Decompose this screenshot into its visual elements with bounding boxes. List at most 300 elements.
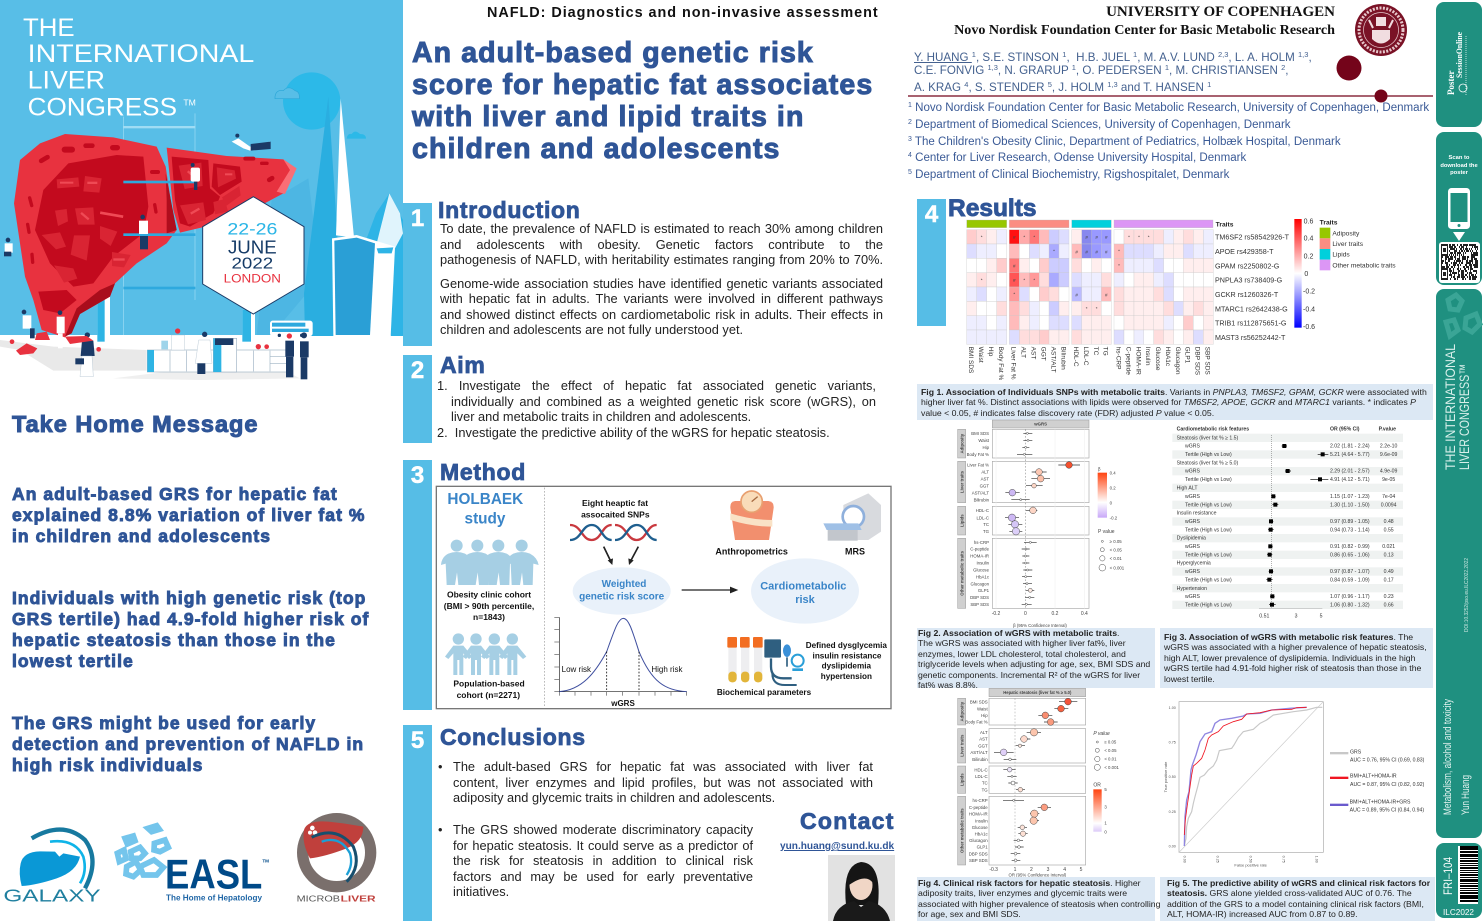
label: population cohort: cohort (n=2271) [457, 690, 520, 700]
significance marks: * [1086, 306, 1088, 311]
sidebar [1436, 2, 1483, 918]
fig 2 caption: Fig 2. Association of wGRS with metabolic traits. [918, 628, 1119, 638]
poster title: with liver and lipid traits in [412, 101, 804, 133]
heatmap colour scale: -0.6 [1303, 324, 1315, 331]
scientist figures [4, 134, 309, 379]
red rubble [10, 332, 101, 355]
logo: microbliver: MICROB [297, 893, 341, 903]
OR values: 4.91 (4.12 - 5.71) [1330, 477, 1370, 483]
fig 2 caption: fat% was 8.8%. [918, 680, 978, 690]
authors: Y. HUANG 1, S.E. STINSON 1, H.B. JUEL 1, M. A.V. LUND 2,3, L. A. HOLM 1,3, [914, 50, 1312, 64]
P values: 0.23 [1384, 594, 1394, 600]
take home message 1 [12, 484, 366, 546]
icon: DNA helices [570, 525, 657, 540]
icon: MRI scanner [823, 493, 881, 541]
fig 5 caption [1160, 877, 1435, 921]
section number 1 [403, 203, 432, 346]
heatmap column labels: TG [1102, 347, 1109, 356]
panel: poster number and barcode: ILC2022 [1443, 907, 1474, 917]
significance marks: # [1013, 235, 1016, 240]
significance marks: # [1075, 292, 1078, 297]
beta legend: -0.2 [1110, 516, 1118, 521]
ROC axes: 1.00 [1315, 856, 1319, 863]
ROC axes: 0.50 [1248, 856, 1252, 863]
fig 3 caption: high ALT, lower prevalence of dyslipidemia. Individuals in the high [1164, 653, 1415, 663]
ROC legend: AUC = 0.76, 95% CI (0.69, 0.83) [1350, 758, 1425, 764]
affiliations: 3 The Children's Obesity Clinic, Department of Pediatrics, Holbæk Hospital, Denmark [908, 136, 1341, 148]
OR values: 1.15 (1.07 - 1.23) [1330, 494, 1370, 500]
poster title: children and adolescents [412, 133, 780, 165]
trait labels: GLP1 [978, 588, 990, 593]
take home message 3: The GRS might be used for early [12, 713, 316, 733]
trait labels: LDL-C [975, 774, 988, 779]
trait labels: AST/ALT [972, 490, 989, 495]
significance marks: * [981, 234, 983, 239]
label: biochemical parameters: Biochemical parameters [717, 688, 812, 697]
ROC axes: 0.50 [1169, 775, 1176, 779]
panel: congress and session details [1436, 289, 1482, 838]
trait labels: HOMA-IR [970, 554, 989, 559]
take home message 3: detection and prevention of NAFLD in [12, 734, 364, 754]
text: introduction: and adolescents with obesity. Genetic factors contribute to the [440, 236, 883, 252]
significance marks: # [1095, 249, 1098, 254]
panels and strips: Liver traits [959, 470, 964, 493]
fig 4 caption: for age, sex and BMI SDS. [918, 909, 1021, 919]
contact email: yun.huang@sund.ku.dk [780, 841, 894, 852]
significance marks: # [1095, 235, 1098, 240]
fig 3 caption: wGRS tertile had 4.91-fold higher risk of steatosis than those in the [1164, 663, 1421, 673]
arrows: SNPs to score [604, 547, 638, 565]
heatmap column labels: C-peptide [1124, 347, 1131, 375]
trait labels: HbA1c [975, 831, 988, 836]
feature labels: High ALT [1177, 485, 1198, 491]
axis labels: 0.2 [1052, 611, 1059, 617]
text: conclusions: content, liver enzymes and lipid profiles, but was not associated with [453, 774, 873, 790]
significance marks: # [1013, 264, 1016, 269]
heatmap column labels: ALT [1020, 347, 1027, 358]
table stripes [1172, 434, 1403, 609]
section number 3: 3 [411, 462, 424, 489]
fig 3 caption: wGRS was associated with a higher prevalence of hepatic steatosis, [1164, 642, 1427, 652]
heatmap column labels: HOMA-IR [1134, 347, 1141, 375]
axis labels: OR (95% Confidence Interval) [1008, 872, 1067, 877]
date hexagon: 2022 [232, 256, 273, 273]
heatmap column labels: BMI SDS [967, 347, 974, 374]
trait labels: Glucagon [970, 581, 990, 586]
traits legend: Liver traits [1332, 241, 1364, 248]
text: introduction: with hepatic fat in adults. The variants were involved in different pathways [440, 291, 883, 306]
trait labels: Insulin [976, 561, 990, 566]
axis labels: 2 [1030, 867, 1033, 873]
heatmap row labels: GPAM rs2250802-G [1215, 262, 1280, 270]
feature labels: Insulin resistance [1177, 511, 1217, 517]
trait labels: Waist [977, 706, 988, 711]
university name: UNIVERSITY OF COPENHAGEN [1106, 4, 1335, 20]
text: conclusions: • [438, 822, 442, 837]
congress name: TM [183, 97, 196, 107]
heatmap column labels: AST [1030, 347, 1037, 359]
trait labels: HOMA-IR [969, 811, 988, 816]
label: defined conditions: dyslipidemia [822, 662, 871, 671]
feature labels: Tertile (High vs Low) [1185, 527, 1232, 533]
ROC legend: GRS [1350, 750, 1362, 756]
axis labels [992, 611, 1088, 628]
ROC axes: 0.25 [1169, 810, 1176, 814]
curve: GRS [1184, 707, 1322, 846]
icon: blood tubes and cuff [727, 637, 804, 685]
significance marks: * [1013, 292, 1015, 297]
heatmap row labels: TRIB1 rs112875651-G [1215, 320, 1287, 328]
heatmap column labels: Hip [987, 347, 994, 357]
P values: 9e-05 [1382, 477, 1395, 483]
take home message 2: Individuals with high genetic risk (top [12, 588, 366, 608]
ROC axes: 0.75 [1281, 856, 1285, 863]
poster title [411, 37, 873, 165]
text: aim: 1. Investigate the effect of hepatic fat associated genetic variants, [437, 378, 876, 393]
P values: 0.13 [1384, 552, 1394, 558]
heatmap column labels: LDL-C [1082, 347, 1089, 366]
chart: wGRS distribution: wGRS [610, 699, 635, 708]
panels and strips: Adiposity [959, 701, 964, 722]
take home message 2: lowest tertile [12, 651, 134, 671]
fig 1 caption: higher liver fat %. Distinct associations with lipids were observed for TM6SF2, APOE, GCKR and MTARC1 variants. * indicates P [921, 397, 1416, 407]
bus [270, 321, 313, 337]
feature labels: Tertile (High vs Low) [1185, 477, 1232, 483]
panel: congress and session details: THE INTERNATIONAL [1442, 344, 1458, 470]
congress name [23, 14, 254, 121]
trait labels: DBP SDS [969, 851, 988, 856]
significance marks: # [1105, 292, 1108, 297]
beta legend: 0.2 [1110, 485, 1116, 490]
logo: microbliver: LIVER [341, 893, 376, 903]
ROC axes: 0.25 [1215, 856, 1219, 863]
text: introduction: children and adolescents are not fully understood yet. [440, 322, 743, 337]
take home message 2 [12, 588, 369, 671]
heatmap column labels: GGT [1040, 347, 1047, 361]
fig 3 caption [1160, 628, 1433, 688]
axis labels: -0.3 [989, 867, 998, 873]
text: conclusions [438, 759, 873, 899]
table header: P.value [1379, 427, 1396, 433]
heatmap colour scale [1294, 218, 1315, 331]
affiliations: 5 Department of Clinical Biochemistry, Rigshospitalet, Denmark [908, 169, 1229, 181]
significance marks: * [1023, 277, 1025, 282]
section number 2 [403, 355, 432, 443]
ROC legend [1330, 750, 1425, 814]
table header: OR (95% CI) [1330, 427, 1360, 433]
significance marks: * [1096, 306, 1098, 311]
ROC axes: 1.00 [1169, 706, 1176, 710]
trait labels: Bilirubin [974, 497, 990, 502]
trait labels: BMI SDS [971, 431, 989, 436]
fig 4 forest plot [957, 688, 1119, 877]
trait labels: AST [981, 476, 989, 481]
text: conclusions: the risk for steatosis in addition to clinical risk [453, 853, 753, 868]
text: introduction: and showed distinct effects on cardiometabolic risk in adults. Their effects in [440, 306, 883, 322]
text: conclusions: adiposity and glycemic traits in children and adolescents. [453, 790, 775, 805]
panel: scan to download [1436, 132, 1482, 285]
significance marks: # [1105, 249, 1108, 254]
axis labels: 0 [1024, 611, 1027, 617]
date hexagon: 22-26 [227, 220, 277, 239]
table header: Cardiometabolic risk features [1177, 427, 1249, 433]
trait labels: GGT [978, 743, 988, 748]
logo: galaxy: GALAXY [3, 885, 101, 905]
OR legend [1093, 783, 1107, 834]
significance marks: * [1033, 277, 1035, 282]
confidence intervals [994, 702, 1077, 860]
text: introduction: Genome-wide association studies have identified genetic variants associated [440, 276, 883, 290]
OR values: 0.86 (0.65 - 1.06) [1330, 552, 1370, 558]
take home message 1: explained 8.8% variation of liver fat % [12, 505, 366, 525]
traits legend: Traits [1320, 220, 1338, 227]
partner logos [3, 813, 376, 905]
trait labels [967, 431, 990, 607]
table header [1177, 427, 1396, 433]
heatmap colour scale: -0.2 [1303, 289, 1315, 296]
section number 4: 4 [925, 201, 938, 228]
weighted genetic risk score: Weighted [602, 579, 646, 590]
panel: scan to download: download the [1440, 163, 1478, 169]
heatmap column labels: HbA1c [1164, 347, 1171, 367]
p value legend: < 0.001 [1110, 565, 1125, 570]
chart: wGRS distribution: Low risk [562, 665, 592, 674]
confidence intervals [1005, 433, 1080, 604]
feature labels: Tertile (High vs Low) [1185, 452, 1232, 458]
feature labels: Tertile (High vs Low) [1185, 502, 1232, 508]
heatmap colour scale: 0.2 [1304, 254, 1314, 261]
significance marks: * [1118, 249, 1120, 254]
liver [14, 134, 297, 337]
trait labels: Hip [982, 445, 990, 450]
logo: easl: TM [262, 859, 269, 864]
heatmap colour scale: -0.4 [1303, 306, 1315, 313]
P values [1380, 444, 1398, 608]
OR values: 0.97 (0.87 - 1.07) [1330, 569, 1370, 575]
trait labels: TG [983, 529, 990, 534]
axis labels: 1 [1014, 867, 1017, 873]
OR legend: 1 [1104, 821, 1107, 826]
significance marks: * [1023, 234, 1025, 239]
icon: obesity cohort people [441, 540, 539, 585]
poster title: An adult-based genetic risk [412, 37, 814, 69]
affiliations: 2 Department of Biomedical Sciences, University of Copenhagen, Denmark [908, 119, 1291, 131]
trait labels: Liver Fat % [967, 463, 989, 468]
heatmap column labels: Body Fat % [997, 347, 1004, 380]
beta legend [1098, 466, 1118, 521]
label: obesity cohort [444, 590, 534, 622]
logo: easl: The Home of Hepatology [166, 893, 262, 903]
fig 1 heatmap [966, 218, 1396, 380]
text: aim: 2. Investigate the predictive ability of the wGRS for hepatic steatosis. [437, 424, 830, 440]
significance marks: # [1085, 249, 1088, 254]
axis labels: 4 [1063, 867, 1066, 873]
traits legend: Other metabolic traits [1332, 262, 1396, 269]
fig 3 forest table [1172, 426, 1403, 620]
significance marks: * [1148, 234, 1150, 239]
heading: aim: Aim [440, 352, 486, 378]
section number 4 [917, 199, 946, 326]
panel: congress and session details: Metabolism, alcohol and toxicity [1442, 699, 1454, 815]
P values: 0.17 [1384, 577, 1394, 583]
heatmap row labels: TM6SF2 rs58542926-T [1215, 234, 1290, 242]
take home message 2: hepatic steatosis than those in the [12, 630, 336, 650]
OR values [1330, 444, 1370, 608]
chart: wGRS distribution: High risk [651, 665, 683, 674]
take home message 2: GRS tertile) had 4.9-fold higher risk of [12, 609, 369, 629]
text: conclusions: initiatives. [453, 884, 509, 899]
weighted genetic risk score [573, 567, 671, 615]
feature labels: wGRS [1185, 444, 1200, 450]
feature labels: Tertile (High vs Low) [1185, 602, 1232, 608]
trait labels: hs-CRP [974, 540, 989, 545]
beta legend: β [1098, 466, 1101, 471]
heatmap column labels: HDL-C [1072, 347, 1079, 367]
text: introduction [440, 221, 883, 337]
trait labels: TC [983, 522, 989, 527]
heatmap cells [967, 230, 1213, 344]
P values: 0.55 [1384, 527, 1394, 533]
OR values: 1.07 (0.96 - 1.17) [1330, 594, 1370, 600]
icon: university seal [1355, 4, 1407, 56]
fig 2 caption [917, 628, 1155, 688]
beta legend: 0 [1110, 500, 1113, 505]
decorative dots and rule [908, 56, 1433, 102]
feature labels: Tertile (High vs Low) [1185, 552, 1232, 558]
panels and strips: Lipids [959, 514, 964, 527]
label: anthropometrics: Anthropometrics [715, 547, 788, 557]
panel: scan to download: poster [1450, 170, 1469, 176]
affiliations [908, 102, 1430, 181]
fig 2 caption: triglyceride levels when adjusting for age, sex, BMI SDS and [918, 659, 1150, 669]
p value legend: < 0.001 [1104, 765, 1119, 770]
take home message 1: in children and adolescents [12, 526, 271, 546]
panel: poster session online: SessionOnline [1455, 32, 1464, 78]
axis: 5 [1320, 614, 1323, 620]
significance marks: # [1085, 235, 1088, 240]
significance marks: # [1105, 235, 1108, 240]
fig 5 caption: ALT, HOMA-IR) increased AUC from 0.87 to 0.89. [1167, 909, 1358, 919]
trait labels: SBP SDS [970, 602, 989, 607]
panels and strips [958, 688, 1086, 865]
fig 1 caption: value < 0.05, # indicates false discovery rate (FDR) adjusted P value < 0.05. [921, 408, 1214, 418]
study name: study [465, 511, 506, 528]
text: conclusions: factors and may be used for early preventative [453, 868, 753, 884]
ROC axes: 0.75 [1169, 741, 1176, 745]
axis labels: 5 [1080, 867, 1083, 873]
significance marks: * [1053, 249, 1055, 254]
traits legend [1320, 220, 1396, 270]
axis: 0.51 [1259, 614, 1269, 620]
authors [914, 50, 1312, 94]
trait labels: HbA1c [976, 574, 990, 579]
feature labels: Steatosis (liver fat % ≥ 1.5) [1177, 435, 1239, 441]
fig 4 caption: associated with higher prevalence of steatosis when controlling [918, 899, 1160, 909]
heatmap column labels [967, 347, 1211, 380]
p value legend: < 0.05 [1110, 547, 1122, 552]
OR values: 1.30 (1.10 - 1.50) [1330, 502, 1370, 508]
ROC legend: AUC = 0.89, 95% CI (0.84, 0.94) [1350, 808, 1424, 814]
panel: congress and session details: LIVER CONGRESS™ [1456, 364, 1472, 470]
heatmap column labels: Liver Fat % [1010, 347, 1017, 380]
panel: scan to download: Scan to [1449, 155, 1470, 161]
significance marks: * [1033, 234, 1035, 239]
section number 1: 1 [411, 205, 424, 232]
trait annotation bar [967, 220, 1234, 228]
fig 4 caption [917, 877, 1155, 921]
p value legend [1098, 529, 1125, 571]
trait labels: Bilirubin [972, 757, 988, 762]
label: SNPs: Eight heaptic fat [582, 498, 648, 508]
trait labels [965, 699, 988, 863]
trait labels: Glucose [973, 568, 990, 573]
significance marks: * [981, 277, 983, 282]
trait labels: Waist [978, 438, 990, 443]
p value legend: < 0.01 [1110, 556, 1122, 561]
fig 5 caption: Fig 5. The predictive ability of wGRS and clinical risk factors for [1167, 878, 1430, 888]
text: aim: individually and combined as a weighted genetic risk score (wGRS), on [451, 394, 876, 408]
significance marks: * [1118, 263, 1120, 268]
text: introduction: To date, the prevalence of NAFLD is estimated to reach 30% among children [440, 221, 883, 236]
heatmap colour scale: 0.4 [1304, 236, 1314, 243]
laboratory bench [147, 338, 287, 372]
traits legend: Lipids [1332, 252, 1350, 259]
panels and strips: Lipids [959, 773, 964, 786]
trait labels: ALT [981, 470, 989, 475]
congress name: THE [23, 14, 75, 42]
logo: galaxy [3, 830, 101, 905]
heading: take home message: Take Home Message [12, 411, 258, 437]
heatmap row labels: MTARC1 rs2642438-G [1215, 305, 1288, 313]
cardiometabolic risk: risk [795, 594, 816, 606]
trait labels: HDL-C [974, 767, 988, 772]
trait labels: LDL-C [976, 515, 989, 520]
section number 2: 2 [411, 357, 424, 384]
fig 3 caption: Fig 3. Association of wGRS with metabolic risk features. The [1164, 632, 1413, 642]
heading: introduction: Introduction [438, 197, 581, 223]
significance marks: * [1138, 234, 1140, 239]
text: aim [437, 378, 876, 440]
trait labels: GGT [980, 483, 989, 488]
heatmap column labels: Glucagon [1174, 347, 1181, 375]
label: defined conditions: Defined dysglycemia [806, 641, 887, 650]
heatmap column labels: DBP SDS [1194, 347, 1201, 376]
trait labels: SBP SDS [969, 858, 988, 863]
heatmap column labels: Bilirubin [1059, 347, 1066, 370]
panel: poster session online: Poster [1446, 70, 1456, 95]
OR values: 0.91 (0.82 - 0.99) [1330, 544, 1370, 550]
feature labels: Dyslipidemia [1177, 536, 1206, 542]
fig 1 caption [917, 384, 1433, 420]
significance marks: # [1075, 249, 1078, 254]
heatmap colour scale: 0.6 [1304, 218, 1314, 225]
ROC legend: BMI+ALT+HOMA-IR+GRS [1350, 799, 1411, 805]
weighted genetic risk score: genetic risk score [579, 592, 665, 603]
axis labels: 3 [1047, 867, 1050, 873]
heading: contact: Contact [800, 808, 895, 834]
method diagram [436, 486, 892, 710]
text: conclusions: The GRS showed moderate discriminatory capacity [453, 822, 753, 837]
trait labels: TG [982, 787, 988, 792]
label: obesity cohort: n=1843) [473, 612, 505, 622]
trait labels: Hip [981, 713, 988, 718]
trait labels: Insulin [975, 818, 988, 823]
author photo [828, 855, 895, 921]
OR values: 0.97 (0.89 - 1.05) [1330, 519, 1370, 525]
panels and strips: Adiposity [959, 433, 964, 454]
trait labels: DBP SDS [970, 595, 989, 600]
section number 5: 5 [411, 727, 424, 754]
